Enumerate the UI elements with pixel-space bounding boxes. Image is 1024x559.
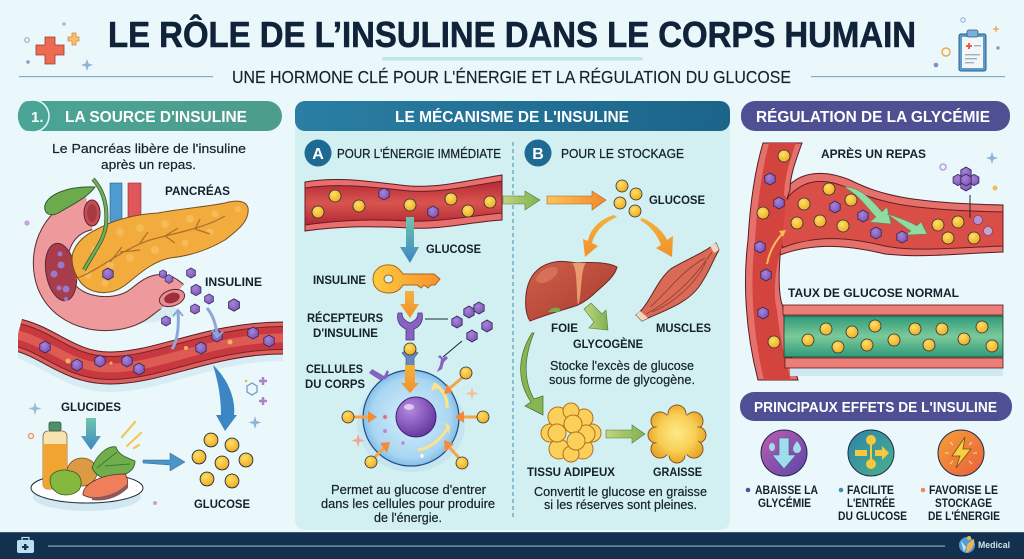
arrow: orange to glucose (547, 191, 606, 210)
illustration: adipose tissue (541, 403, 601, 462)
effect: abaisse la glycémie: GLYCÉMIE (758, 497, 811, 510)
arrow: glucides down (81, 418, 101, 450)
heading: pour l'énergie immédiate: POUR L'ÉNERGIE IMMÉDIATE (337, 146, 501, 161)
heading: la source d'insuline: LA SOURCE D'INSULINE (65, 109, 247, 126)
text: permet au glucose: de l'énergie. (374, 511, 442, 525)
arrow: glucose down (400, 217, 419, 263)
effect: favorise le stockage: DE L'ÉNERGIE (928, 510, 1000, 523)
effect: facilite l'entrée: FACILITE (847, 485, 894, 497)
heading: régulation: RÉGULATION DE LA GLYCÉMIE (756, 109, 990, 126)
panel: la source d'insuline (0, 100, 295, 511)
effect: favorise le stockage: STOCKAGE (935, 498, 992, 510)
arrow: insulin release (172, 308, 223, 349)
text: stocke l'excès: Stocke l'excès de glucose (550, 359, 694, 373)
arrow: liver to fat (521, 333, 543, 415)
badge: B (524, 140, 552, 166)
label: glucose: GLUCOSE (649, 193, 705, 207)
text: convertit le glucose: si les réserves sont pleines. (544, 498, 697, 512)
blood vessel: A (305, 175, 502, 231)
arrow: glucose to muscle (640, 218, 673, 257)
illustration: pancreas and duodenum (41, 179, 248, 324)
label: cellules du corps (305, 362, 365, 391)
title underline (382, 57, 643, 60)
label: glucides: GLUCIDES (61, 400, 121, 414)
label: cellules du corps: CELLULES (306, 362, 363, 376)
text: permet au glucose (321, 483, 495, 525)
arrow: adipose to fat (606, 425, 645, 443)
effect: abaisse la glycémie: ABAISSE LA (755, 485, 818, 497)
label: insuline: INSULINE (313, 273, 366, 287)
icon: clipboard (934, 18, 1000, 71)
label: tissu adipeux: TISSU ADIPEUX (527, 465, 615, 479)
text: pancréas intro: après un repas. (101, 157, 196, 172)
icon: medical briefcase (17, 538, 34, 553)
label: taux de glucose normal: TAUX DE GLUCOSE NORMAL (788, 286, 959, 300)
blood vessel with insulin (0, 300, 295, 376)
label: insuline: INSULINE (205, 275, 262, 289)
illustration: normal vessel (783, 305, 1003, 376)
heading: la source d'insuline: 1. (31, 109, 44, 126)
effect: facilite l'entrée: L'ENTRÉE (847, 497, 895, 510)
arrow: vessel to glucose (213, 365, 237, 431)
illustration: dilated vessel (745, 143, 1003, 380)
label: glucose: GLUCOSE (426, 242, 481, 256)
text: pancréas intro: Le Pancréas libère de l'insuline (52, 141, 246, 156)
effect: favorise le stockage: FAVORISE LE (929, 485, 998, 497)
text: stocke l'excès (549, 359, 695, 387)
arrow: key to receptor (400, 291, 419, 318)
illustration: cell with glucose (342, 343, 489, 472)
badge: B: B (532, 146, 544, 163)
text: stocke l'excès: sous forme de glycogène. (549, 373, 695, 387)
effect: facilite l'entrée (838, 430, 907, 523)
text: pancréas intro (52, 141, 246, 172)
glucose molecules (614, 180, 642, 217)
icon: down arrow with drops (761, 430, 807, 476)
heading: le mécanisme (295, 101, 730, 131)
icon: lightning (938, 430, 984, 476)
glucose molecules (192, 433, 253, 488)
label: récepteurs d'insuline: RÉCEPTEURS (307, 310, 383, 325)
arrow: meal to glucose (143, 453, 185, 471)
heading: régulation (741, 101, 1010, 131)
badge: A (304, 140, 332, 166)
footer bar (0, 532, 1024, 559)
label: muscles: MUSCLES (656, 321, 711, 335)
illustration: muscle (636, 243, 719, 321)
effect: facilite l'entrée: DU GLUCOSE (838, 511, 907, 523)
insulin cluster (425, 302, 492, 357)
free insulin hexagons (159, 268, 239, 326)
icon: insulin receptor (398, 313, 422, 340)
label: récepteurs d'insuline (307, 310, 383, 340)
illustration: liver (526, 261, 617, 321)
label: cellules du corps: DU CORPS (305, 377, 365, 391)
label: foie: FOIE (551, 321, 578, 335)
icon: insulin key (373, 265, 440, 293)
heading: la source d'insuline (17, 100, 282, 132)
label: pancréas: PANCRÉAS (165, 183, 230, 198)
illustration: meal plate (31, 422, 143, 511)
heading: principaux effets (740, 392, 1012, 421)
heading: pour le stockage: POUR LE STOCKAGE (561, 147, 684, 161)
arrow: liver to glycogen (584, 303, 608, 330)
label: après un repas: APRÈS UN REPAS (821, 146, 926, 161)
icon: medical cross (25, 22, 93, 71)
effect: favorise le stockage (921, 430, 1000, 523)
icon: insulin molecule (940, 152, 998, 218)
illustration: fat (648, 405, 706, 463)
text: permet au glucose: Permet au glucose d'entrer (331, 483, 486, 497)
panel: régulation de la glycémie (740, 101, 1012, 523)
label: glycogène: GLYCOGÈNE (573, 336, 643, 351)
label: graisse: GRAISSE (653, 465, 702, 479)
text: permet au glucose: dans les cellules pour produire (321, 497, 495, 511)
panel: le mécanisme de l'insuline (295, 101, 730, 530)
arrow: glucose to liver (583, 215, 617, 257)
divider dashes (512, 142, 514, 520)
title: LE RÔLE DE L’INSULINE DANS LE CORPS HUMAIN (108, 13, 916, 55)
subtitle: UNE HORMONE CLÉ POUR L'ÉNERGIE ET LA RÉGULATION DU GLUCOSE (232, 67, 791, 87)
decorative sparkles (24, 220, 267, 505)
heading: principaux effets: PRINCIPAUX EFFETS DE L'INSULINE (754, 400, 997, 416)
text: convertit le glucose (534, 485, 707, 512)
label: glucose: GLUCOSE (194, 497, 250, 511)
effect: abaisse la glycémie (746, 430, 818, 510)
text: convertit le glucose: Convertit le glucose en graisse (534, 485, 707, 499)
arrow: green to B (503, 191, 540, 210)
heading: le mécanisme: LE MÉCANISME DE L'INSULINE (395, 109, 629, 126)
label: récepteurs d'insuline: D'INSULINE (313, 326, 378, 340)
icon: glucose entry arrow (848, 430, 894, 476)
logo text: Medical (978, 540, 1010, 550)
icon: medical logo (959, 536, 975, 553)
badge: A: A (312, 146, 324, 163)
